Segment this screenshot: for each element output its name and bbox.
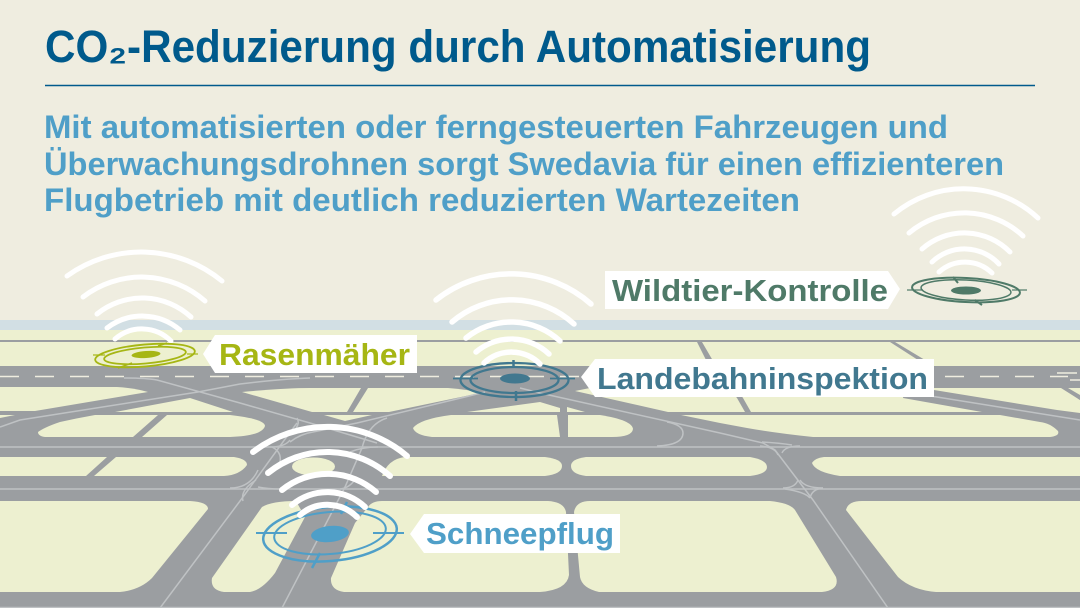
airport map <box>0 320 1080 608</box>
label: Rasenmäher: Rasenmäher <box>219 337 410 372</box>
signal arcs <box>67 252 222 341</box>
intro text: Überwachungsdrohnen sorgt Swedavia für einen effizienteren <box>44 146 1004 182</box>
label: Schneepflug: Schneepflug <box>426 516 614 551</box>
target marker <box>453 360 575 401</box>
taxiway centre lines <box>0 378 1080 608</box>
drone: Landebahninspektion <box>436 274 591 401</box>
target marker <box>256 501 404 568</box>
intro text: Mit automatisierten oder ferngesteuerten Fahrzeugen und <box>44 109 948 145</box>
title: CO₂-Reduzierung durch Automatisierung <box>45 21 871 72</box>
drone: Schneepflug <box>253 427 407 568</box>
signal arcs <box>253 427 407 517</box>
runway markings <box>0 376 1045 378</box>
target marker <box>907 275 1027 305</box>
label: Wildtier-Kontrolle: Wildtier-Kontrolle <box>612 273 888 308</box>
intro text: Flugbetrieb mit deutlich reduzierten Wartezeiten <box>44 182 800 218</box>
drone: Wildtier-Kontrolle <box>894 189 1038 305</box>
signal arcs <box>436 274 591 364</box>
intro text <box>44 109 1004 218</box>
label: Landebahninspektion: Landebahninspektion <box>597 361 928 396</box>
target marker <box>93 340 198 371</box>
signal arcs <box>894 189 1038 273</box>
drone: Rasenmäher <box>67 252 222 371</box>
